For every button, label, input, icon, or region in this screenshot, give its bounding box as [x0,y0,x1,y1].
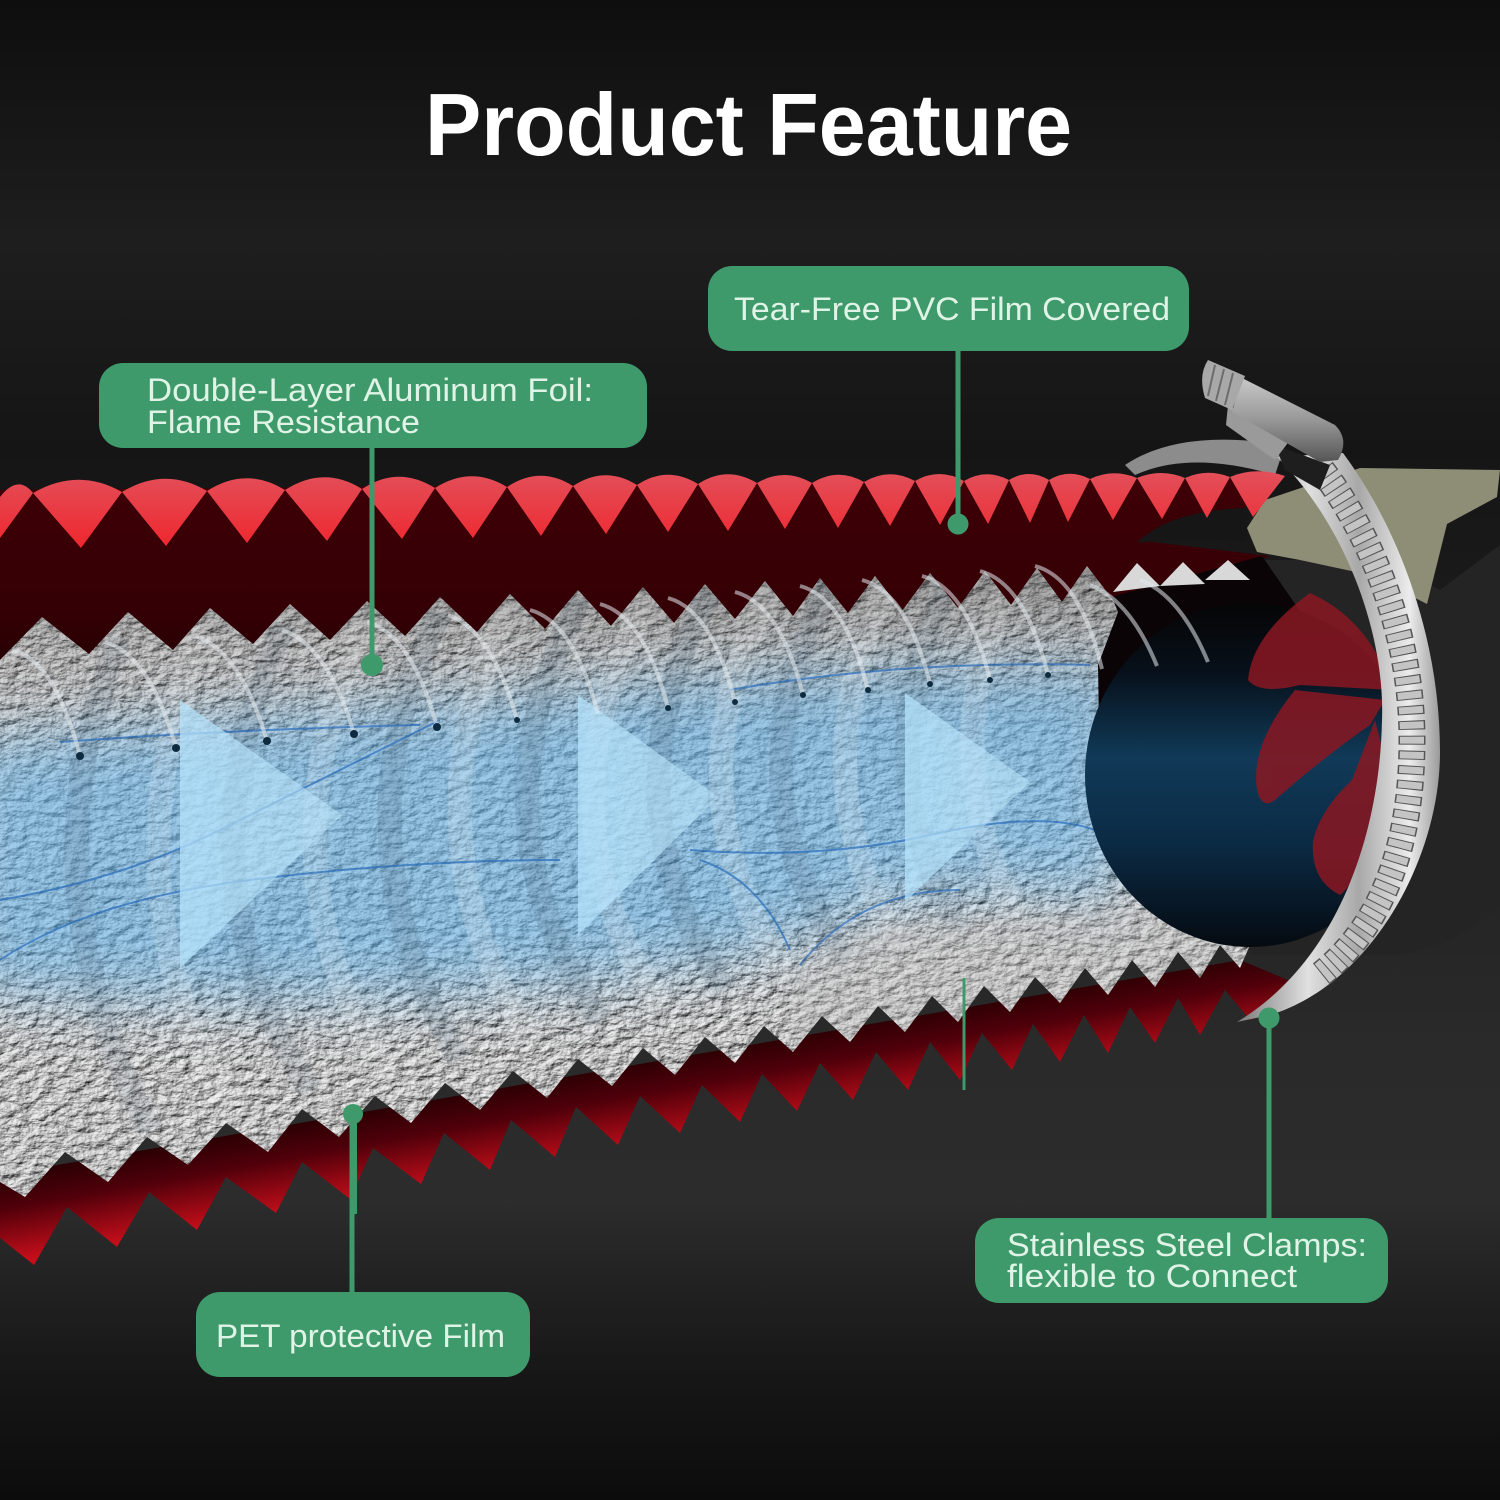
label: Stainless Steel Clamps: Stainless Steel Clamps: [1007,1227,1367,1263]
arrow: air flow 2 [578,695,718,935]
pale foil edge [790,900,1250,1060]
label: Double-Layer Aluminum Foil: Flame Resistance [147,404,420,440]
wires inside the duct [12,566,1208,756]
arrow: air flow 3 [905,693,1030,902]
illustration: fan with duct [0,360,1500,1265]
label: Tear-Free PVC Film Covered: Tear-Free PVC Film Covered [734,291,1170,327]
red pleats, bottom [0,960,1300,1265]
fan body [1250,545,1500,955]
thin blue streamlines [0,664,1095,965]
gap between outer and inner duct [1137,508,1247,543]
wire end points [76,672,1051,760]
light tips of inner pleats [1113,560,1250,592]
stainless steel clamp band [1237,453,1440,1022]
metal rim behind the duct [1125,440,1285,475]
blue air flow glow [0,669,1120,998]
title: Product Feature [425,75,1072,174]
interior darkness above opening [1095,556,1320,720]
label: Double-Layer Aluminum Foil: Double-Layer Aluminum Foil: [147,372,593,408]
arrow: air flow 1 [180,700,342,968]
clamp slots [1320,470,1412,975]
stray green pointer line [962,978,966,1090]
label: Tear-Free PVC Film Covered [708,266,1189,534]
label: Double-Layer Aluminum Foil [99,363,647,676]
aluminum foil layer [0,550,1260,1210]
maroon duct interior [0,478,1280,700]
label: PET protective Film: PET protective Film [216,1318,505,1354]
clamp screw housing [1202,360,1343,490]
red scalloped pleats, top [0,471,1285,548]
red fan blades [1248,593,1392,895]
insulation collar [1247,468,1500,604]
foil ribs [77,578,1020,1130]
label: Stainless Steel Clamps [975,1008,1388,1303]
fan opening [1085,603,1415,947]
label: Stainless Steel Clamps: flexible to Connect [1007,1258,1297,1294]
label: PET protective Film [196,1104,530,1377]
